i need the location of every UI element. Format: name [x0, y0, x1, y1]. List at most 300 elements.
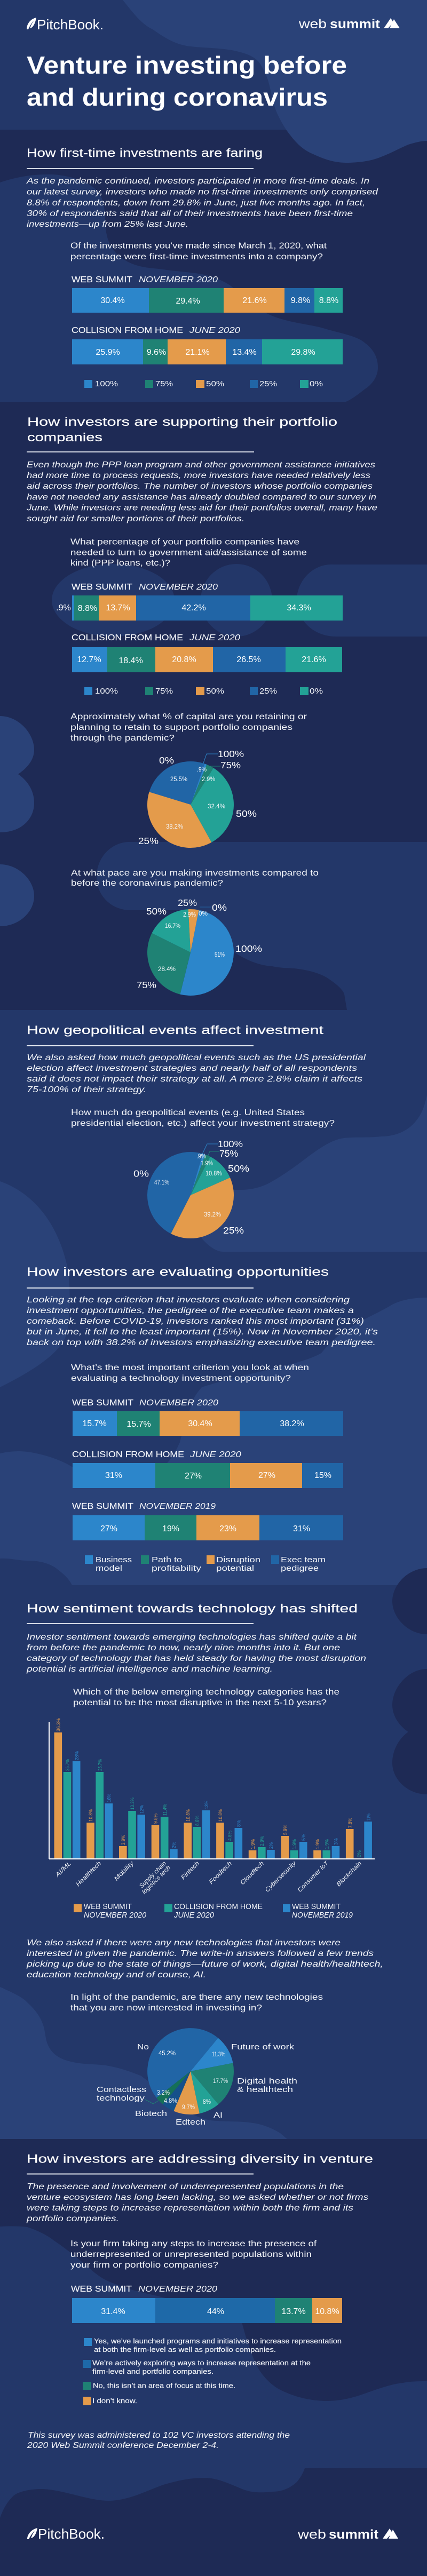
- series label: Web Summit November 2019: WEB SUMMIT: [72, 1502, 133, 1511]
- intro text: We also asked how much geopolitical events such as the US presidential: [27, 1053, 366, 1062]
- stacked bar: Web Summit 2019: 23%: [219, 1524, 236, 1533]
- stacked bar: Collision from Home: 9.6%: [147, 348, 166, 357]
- pie chart: geopolitical impact: 10.8%: [205, 1170, 222, 1177]
- series label: Web Summit November 2020: WEB SUMMIT: [72, 1398, 133, 1408]
- category labels: Cloudtech: [239, 1861, 265, 1886]
- legend: [85, 1555, 326, 1573]
- stacked bar: Collision from Home: 20.8%: [172, 655, 196, 664]
- bar group: AI/ML: 36.3%: [56, 1718, 61, 1731]
- panel: evaluating opportunities: [27, 1265, 378, 1573]
- bar group: Foodtech: 4.8%: [227, 1831, 232, 1841]
- intro text: back on top with 38.2% of investors emphasizing executive team pedigree.: [27, 1338, 376, 1347]
- series label: Web Summit November 2020: WEB SUMMIT: [72, 275, 132, 284]
- intro text: Looking at the top criterion that investors evaluate when considering: [27, 1295, 350, 1305]
- legend: [83, 2337, 342, 2405]
- logo: Web Summit: web: [298, 17, 327, 31]
- pie chart: investment pace: 25%: [178, 897, 197, 908]
- question: potential to be the most disruptive in the next 5-10 years?: [73, 1698, 327, 1707]
- stacked bar: Web Summit 2019: [73, 1515, 343, 1540]
- legend: COLLISION FROM HOME: [174, 1902, 263, 1911]
- series label: Web Summit November 2020: NOVEMBER 2020: [139, 583, 218, 592]
- pie chart: new technologies: 4.8%: [164, 2097, 177, 2104]
- heading: How investors are addressing diversity in venture: [27, 2152, 373, 2165]
- pie chart: investment pace: 16.7%: [165, 922, 180, 929]
- title: [27, 51, 347, 111]
- legend: model: [96, 1564, 122, 1573]
- legend: Path to: [152, 1555, 182, 1564]
- logo: Web Summit: [298, 17, 400, 31]
- pie chart: new technologies: Digital health: [237, 2077, 297, 2086]
- stacked bar: Web Summit 2019: 19%: [162, 1524, 179, 1533]
- bar group: Blockchain: 11%: [366, 1814, 371, 1820]
- pie chart: investment pace: 51%: [215, 951, 225, 958]
- stacked bar: Web Summit 2019: 27%: [100, 1524, 117, 1533]
- intro text: portfolio companies.: [26, 2214, 119, 2223]
- title: Venture investing before: [27, 51, 347, 79]
- question: Which of the below emerging technology categories has the: [73, 1688, 339, 1697]
- legend: [84, 687, 323, 696]
- category labels: Fintech: [180, 1861, 201, 1881]
- heading: [27, 415, 337, 444]
- series label: Collision from Home June 2020: JUNE 2020: [189, 326, 240, 335]
- stacked bar: Web Summit: 29.4%: [176, 297, 200, 306]
- legend: 100%: [95, 687, 118, 696]
- category labels: Cybersecurity: [264, 1860, 298, 1894]
- bar group: Healthtech: 10.8%: [88, 1809, 93, 1822]
- legend: Exec team: [281, 1555, 326, 1564]
- bar group: AI/ML: 28%: [74, 1751, 80, 1760]
- bar group: Healthtech: [86, 1759, 113, 1858]
- stacked bar: Web Summit 2020: 15.7%: [82, 1419, 107, 1428]
- bar group: Mobility: 12%: [139, 1805, 144, 1814]
- pie chart: capital retained: 38.2%: [166, 823, 183, 830]
- bar chart: disruptive technologies: [49, 1718, 375, 1896]
- logo: Web Summit footer: web: [297, 2527, 326, 2542]
- series label: Collision from Home June 2020: [72, 1450, 241, 1459]
- stacked bar: Web Summit: 9.8%: [291, 296, 310, 305]
- heading: companies: [27, 431, 102, 444]
- legend: WEB SUMMIT: [84, 1902, 132, 1911]
- intro text: from before the pandemic to now, nearly nine months into it. But one: [27, 1643, 340, 1652]
- body text: interested in given the pandemic. The write-in answers followed a few trends: [27, 1949, 374, 1958]
- stacked bar: Collision from Home: [72, 647, 342, 672]
- survey note: This survey was administered to 102 VC investors attending the: [28, 2431, 290, 2440]
- question: kind (PPP loans, etc.)?: [70, 559, 170, 568]
- bar group: Supply chain logistics tech: 2%: [171, 1842, 177, 1848]
- pie chart: new technologies: 45.2%: [159, 2049, 176, 2057]
- question: [70, 1993, 323, 2013]
- intro text: were taking steps to increase representation within both the firm and its: [27, 2204, 353, 2213]
- bar group: Healthtech: 16%: [107, 1794, 112, 1802]
- bar group: Mobility: 3.9%: [121, 1835, 126, 1845]
- question: [70, 538, 307, 568]
- question: Approximately what % of capital are you retaining or: [70, 712, 307, 721]
- logo: Web Summit footer: summit: [329, 2527, 378, 2542]
- stacked bar: Collision from Home: 27%: [185, 1472, 202, 1481]
- category labels: [54, 1860, 363, 1896]
- pie chart: capital retained: 50%: [236, 808, 257, 819]
- stacked bar: Web Summit 2020: [73, 1411, 343, 1436]
- legend: 50%: [206, 687, 224, 696]
- pie chart: investment pace: 50%: [146, 906, 167, 917]
- question: needed to turn to government aid/assistance of some: [70, 548, 307, 557]
- question: How much do geopolitical events (e.g. United States: [71, 1108, 305, 1117]
- pie chart: geopolitical impact: 100%: [218, 1139, 243, 1149]
- bar group: Cybersecurity: 1.9%: [292, 1839, 297, 1849]
- pie chart: new technologies: No: [137, 2042, 149, 2052]
- intro text: June. While investors are needing less aid for their portfolios overall, many have: [26, 504, 377, 513]
- intro text: category of technology that has held steady for having the most disruption: [27, 1654, 366, 1663]
- series label: Web Summit November 2019: [72, 1502, 216, 1511]
- pie chart: new technologies: [97, 2028, 297, 2127]
- bar group: Healthtech: 25.7%: [97, 1759, 102, 1771]
- bar group: Cybersecurity: [281, 1825, 307, 1858]
- stacked bar: Collision from Home: 25.9%: [96, 348, 120, 357]
- intro text: election affect investment strategies and nearly half of all respondents: [27, 1064, 357, 1073]
- pie chart: new technologies: 11.3%: [212, 2050, 225, 2058]
- legend: 75%: [155, 379, 173, 388]
- bar group: Cloudtech: 2.9%: [259, 1836, 265, 1846]
- category labels: Mobility: [113, 1860, 136, 1882]
- intro text: [26, 177, 378, 229]
- pie chart: capital retained: 2.9%: [202, 775, 215, 783]
- panel: supporting portfolio companies: [26, 415, 377, 996]
- intro text: [26, 460, 377, 523]
- heading: How sentiment towards technology has shifted: [27, 1602, 358, 1615]
- pie chart: new technologies: 3.2%: [157, 2089, 170, 2096]
- pie chart: new technologies: technology: [97, 2094, 145, 2103]
- stacked bar: Collision from Home: 18.4%: [118, 656, 143, 665]
- series label: Collision from Home June 2020: [72, 633, 240, 642]
- series label: Web Summit November 2020: [72, 1398, 218, 1408]
- intro text: comeback. Before COVID-19, investors ranked this most important (31%): [27, 1317, 364, 1326]
- intro text: [27, 1053, 366, 1094]
- legend: 50%: [206, 379, 224, 388]
- pie chart: capital retained: 0%: [159, 755, 174, 766]
- stacked bar: Collision from Home: 31%: [105, 1471, 122, 1480]
- question: [71, 1108, 335, 1128]
- series label: Web Summit November 2020: [72, 275, 218, 284]
- series label: Web Summit November 2020: [71, 2285, 217, 2294]
- intro text: [26, 1633, 366, 1674]
- legend: firm-level and portfolio companies.: [92, 2367, 213, 2375]
- bar group: Cloudtech: [249, 1836, 275, 1858]
- stacked bar: diversity: 44%: [207, 2307, 224, 2316]
- pie chart: capital retained: 75%: [220, 760, 241, 770]
- question: [70, 241, 327, 261]
- question: What’s the most important criterion you look at when: [71, 1363, 309, 1372]
- stacked bar: Collision from Home: 15%: [314, 1471, 331, 1480]
- pie chart: capital retained: [138, 749, 257, 848]
- pie chart: geopolitical impact: 47.1%: [154, 1179, 169, 1186]
- intro text: have not needed any assistance has already doubled compared to our survey in: [27, 493, 376, 502]
- category labels: Supply chain: [138, 1861, 168, 1890]
- intro text: said it does not impact their strategy at all. A mere 2.8% claim it affects: [27, 1075, 362, 1084]
- pie chart: investment pace: 100%: [235, 943, 262, 954]
- stacked bar: Web Summit: 30.4%: [100, 296, 125, 305]
- legend: [74, 1902, 353, 1920]
- bar group: Consumer IoT: 3%: [334, 1838, 339, 1845]
- pie chart: capital retained: .9%: [197, 766, 207, 773]
- heading: How investors are evaluating opportunities: [27, 1265, 329, 1278]
- question: planning to retain to support portfolio companies: [70, 723, 292, 732]
- category labels: Foodtech: [208, 1861, 233, 1886]
- pie chart: new technologies: Biotech: [135, 2109, 167, 2118]
- bar group: Fintech: 8.6%: [195, 1816, 200, 1826]
- intro text: potential is artificial intelligence and machine learning.: [26, 1665, 273, 1674]
- legend: No, this isn’t an area of focus at this time.: [93, 2382, 235, 2389]
- question: presidential election, etc.) affect your investment strategy?: [71, 1119, 335, 1128]
- pie chart: investment pace: [137, 897, 262, 996]
- bar group: Mobility: 13.3%: [130, 1798, 135, 1810]
- pie chart: investment pace: 0%: [199, 910, 208, 917]
- stacked bar: Web Summit: 8.8%: [319, 296, 338, 305]
- bar group: Foodtech: 8%: [236, 1820, 241, 1827]
- intro text: As the pandemic continued, investors participated in more first-time deals. In: [26, 177, 369, 186]
- question: that you are now interested in investing in?: [70, 2003, 262, 2013]
- bar group: Cloudtech: 1.9%: [250, 1839, 256, 1849]
- question: your firm or portfolio companies?: [70, 2261, 218, 2270]
- intro text: 30% of respondents said that all of their investments have been first-time: [27, 209, 353, 218]
- stacked bar: Collision from Home: 21.6%: [302, 655, 326, 664]
- series label: Web Summit November 2020: NOVEMBER 2020: [139, 1398, 218, 1408]
- legend: JUNE 2020: [173, 1911, 215, 1920]
- legend: We’re actively exploring ways to increase representation at the: [92, 2359, 311, 2367]
- stacked bar: diversity: 10.8%: [315, 2307, 339, 2316]
- panel: geopolitical events: [27, 1023, 366, 1238]
- bar group: Foodtech: 10.8%: [218, 1809, 223, 1822]
- legend: 75%: [155, 687, 173, 696]
- legend: 0%: [310, 379, 323, 388]
- body text: picking up due to the state of things—future of work, digital health/healthtech,: [26, 1960, 383, 1969]
- pie chart: new technologies: AI: [213, 2111, 223, 2120]
- stacked bar: Collision from Home: [73, 1463, 343, 1488]
- intro text: 8.8% of respondents, down from 29.8% in June, just five months ago. In fact,: [27, 198, 365, 208]
- pie chart: investment pace: 2.9%: [183, 911, 196, 918]
- logo: PitchBook footer: PitchBook.: [38, 2526, 105, 2542]
- question: Of the investments you’ve made since March 1, 2020, what: [70, 241, 327, 251]
- pie chart: new technologies: 9.7%: [182, 2103, 195, 2111]
- question: [70, 2239, 317, 2270]
- category labels: Consumer IoT: [297, 1860, 330, 1894]
- question: underrepresented or unrepresented populations within: [70, 2250, 312, 2259]
- pie chart: geopolitical impact: 1.9%: [201, 1159, 213, 1167]
- question: evaluating a technology investment opportunity?: [71, 1374, 291, 1383]
- series label: Collision from Home June 2020: COLLISION FROM HOME: [72, 326, 183, 335]
- question: What percentage of your portfolio companies have: [70, 538, 299, 546]
- series label: Collision from Home June 2020: COLLISION FROM HOME: [72, 633, 183, 642]
- question: [71, 1363, 309, 1383]
- pie chart: geopolitical impact: [133, 1139, 249, 1238]
- pie chart: new technologies: Edtech: [176, 2118, 205, 2127]
- stacked bar: Web Summit 2019: 31%: [293, 1524, 310, 1533]
- stacked bar: Web Summit: 8.8%: [78, 604, 97, 613]
- bar group: Fintech: [184, 1801, 210, 1858]
- panel: addressing diversity: [26, 2152, 373, 2405]
- question: [71, 869, 319, 888]
- pie chart: investment pace: 0%: [212, 902, 227, 913]
- stacked bar: Collision from Home: 27%: [258, 1471, 275, 1480]
- panel: sentiment towards technology: [26, 1602, 383, 2127]
- bar group: Foodtech: [216, 1809, 242, 1858]
- stacked bar: Web Summit: .9%: [56, 603, 71, 613]
- series label: Collision from Home June 2020: JUNE 2020: [189, 633, 240, 642]
- pie chart: capital retained: 32.4%: [208, 802, 225, 810]
- bar group: Consumer IoT: [313, 1838, 339, 1858]
- question: [70, 712, 307, 743]
- stacked bar: diversity: 13.7%: [281, 2307, 306, 2316]
- intro text: venture ecosystem has long been lacking, so we asked whether or not firms: [27, 2193, 368, 2202]
- question: In light of the pandemic, are there any new technologies: [70, 1993, 323, 2002]
- series label: Web Summit November 2020: [72, 583, 218, 592]
- stacked bar: Web Summit: [72, 288, 343, 313]
- legend: profitability: [152, 1564, 202, 1573]
- question: Is your firm taking any steps to increase the presence of: [70, 2239, 317, 2248]
- stacked bar: Collision from Home: 29.8%: [291, 348, 315, 357]
- bar group: Supply chain logistics tech: [152, 1804, 178, 1858]
- intro text: aid across their portfolios. The number of investors whose portfolio companies: [27, 482, 373, 491]
- panel: first-time investments: [26, 146, 378, 388]
- legend: at both the firm-level as well as portfolio companies.: [94, 2346, 276, 2354]
- survey note: [27, 2431, 290, 2450]
- bar group: Consumer IoT: 1.9%: [324, 1839, 329, 1849]
- bar group: Blockchain: [346, 1814, 372, 1858]
- stacked bar: Web Summit: 34.3%: [287, 603, 311, 613]
- legend: I don’t know.: [92, 2397, 137, 2405]
- series label: Collision from Home June 2020: COLLISION FROM HOME: [72, 1450, 184, 1459]
- intro text: but in June, it fell to the least important (15%). Now in November 2020, it’s: [27, 1327, 378, 1337]
- body text: We also asked if there were any new technologies that investors were: [27, 1938, 341, 1947]
- heading: How first-time investments are faring: [27, 146, 263, 160]
- pie chart: geopolitical impact: 25%: [223, 1225, 244, 1236]
- stacked bar: Web Summit 2020: 15.7%: [126, 1420, 151, 1429]
- legend: [84, 379, 323, 388]
- title: and during coronavirus: [27, 83, 328, 111]
- stacked bar: Web Summit: 13.7%: [106, 603, 130, 613]
- legend: 25%: [259, 379, 277, 388]
- stacked bar: Collision from Home: [72, 339, 343, 364]
- bar group: Cloudtech: 2%: [268, 1842, 274, 1849]
- question: At what pace are you making investments compared to: [71, 869, 319, 878]
- bar group: Cybersecurity: 5%: [301, 1834, 306, 1841]
- bar group: Supply chain logistics tech: 11.4%: [162, 1804, 168, 1816]
- legend: potential: [216, 1564, 254, 1573]
- logo: PitchBook: PitchBook.: [37, 17, 104, 33]
- pie chart: capital retained: 100%: [218, 749, 244, 759]
- pie chart: investment pace: 28.4%: [158, 965, 176, 973]
- bar group: Fintech: 10.8%: [185, 1809, 191, 1822]
- question: through the pandemic?: [70, 734, 175, 743]
- intro text: had more time to process requests, more investors have needed relatively less: [27, 471, 370, 480]
- pie chart: geopolitical impact: 39.2%: [204, 1211, 221, 1218]
- question: percentage were first-time investments into a company?: [70, 252, 323, 261]
- stacked bar: Collision from Home: 12.7%: [77, 655, 101, 664]
- pie chart: new technologies: 8%: [203, 2098, 211, 2105]
- bar group: AI/ML: 25.7%: [65, 1759, 70, 1771]
- pie chart: capital retained: 25.5%: [170, 775, 187, 783]
- stacked bar: Collision from Home: 13.4%: [232, 348, 257, 357]
- stacked bar: Web Summit: 42.2%: [181, 603, 206, 613]
- heading: How geopolitical events affect investment: [27, 1023, 323, 1037]
- stacked bar: Web Summit 2020: 38.2%: [280, 1419, 304, 1428]
- survey note: 2020 Web Summit conference December 2-4.: [27, 2441, 219, 2450]
- pie chart: new technologies: 17.7%: [213, 2077, 228, 2085]
- body text: [26, 1938, 383, 1979]
- category labels: logistics tech: [141, 1865, 172, 1896]
- series label: Web Summit November 2020: NOVEMBER 2020: [138, 2285, 217, 2294]
- category labels: Healthtech: [75, 1861, 102, 1888]
- body text: education technology and of course, AI.: [27, 1970, 206, 1979]
- intro text: [26, 2182, 368, 2223]
- series label: Collision from Home June 2020: [72, 326, 240, 335]
- bar group: Supply chain logistics tech: 9.8%: [153, 1814, 159, 1824]
- legend: NOVEMBER 2020: [84, 1911, 147, 1920]
- category labels: Blockchain: [336, 1861, 363, 1888]
- intro text: investments—up from 25% last June.: [27, 220, 188, 229]
- pie chart: geopolitical impact: 75%: [219, 1148, 238, 1159]
- bar group: Cybersecurity: 5.9%: [283, 1825, 288, 1835]
- bar group: Consumer IoT: 1.9%: [315, 1839, 320, 1849]
- pie chart: new technologies: Future of work: [231, 2042, 295, 2052]
- logo: Web Summit footer: [297, 2527, 398, 2542]
- stacked bar: Collision from Home: 26.5%: [236, 655, 261, 664]
- intro text: The presence and involvement of underrepresented populations in the: [27, 2182, 344, 2191]
- legend: 0%: [310, 687, 323, 696]
- series label: Web Summit November 2020: WEB SUMMIT: [72, 583, 132, 592]
- series label: Web Summit November 2020: NOVEMBER 2020: [139, 275, 218, 284]
- intro text: 75-100% of their strategy.: [27, 1085, 146, 1094]
- intro text: [27, 1295, 378, 1347]
- bar group: Blockchain: 0%: [357, 1850, 362, 1857]
- question: [73, 1688, 339, 1707]
- legend: Business: [96, 1555, 132, 1564]
- intro text: Even though the PPP loan program and other government assistance initiatives: [27, 460, 375, 470]
- series label: Web Summit November 2019: NOVEMBER 2019: [139, 1502, 216, 1511]
- legend: NOVEMBER 2019: [292, 1911, 353, 1920]
- intro text: investment opportunities, the pedigree of the executive team makes a: [27, 1306, 354, 1315]
- stacked bar: diversity: [72, 2298, 342, 2323]
- stacked bar: Web Summit 2020: 30.4%: [188, 1419, 212, 1428]
- bar group: Fintech: 13%: [204, 1801, 209, 1809]
- pie chart: investment pace: 75%: [137, 980, 156, 990]
- pie chart: geopolitical impact: .9%: [196, 1152, 206, 1160]
- bar group: AI/ML: [54, 1718, 80, 1858]
- stacked bar: Web Summit: 21.6%: [242, 296, 267, 305]
- pie chart: new technologies: Contactless: [97, 2085, 146, 2094]
- legend: pedigree: [281, 1564, 319, 1573]
- pie chart: capital retained: 25%: [138, 836, 159, 846]
- stacked bar: diversity: 31.4%: [101, 2307, 125, 2316]
- series label: Collision from Home June 2020: JUNE 2020: [189, 1450, 241, 1459]
- pie chart: geopolitical impact: 50%: [228, 1163, 249, 1174]
- legend: Yes, we’ve launched programs and initiatives to increase representation: [94, 2337, 342, 2345]
- stacked bar: Collision from Home: 21.1%: [185, 348, 210, 357]
- series label: Web Summit November 2020: WEB SUMMIT: [71, 2285, 132, 2294]
- logo: Web Summit: summit: [330, 17, 380, 31]
- pie chart: new technologies: & healthtech: [237, 2085, 293, 2094]
- bar group: Mobility: [119, 1798, 145, 1858]
- legend: WEB SUMMIT: [292, 1902, 341, 1911]
- legend: Disruption: [216, 1555, 260, 1564]
- intro text: Investor sentiment towards emerging technologies has shifted quite a bit: [27, 1633, 357, 1642]
- category labels: AI/ML: [54, 1861, 73, 1879]
- bar group: Blockchain: 7.8%: [347, 1818, 353, 1828]
- question: before the coronavirus pandemic?: [71, 879, 223, 888]
- pie chart: geopolitical impact: 0%: [133, 1168, 149, 1179]
- intro text: our latest survey, investors who made no first-time investments only comprised: [27, 188, 378, 196]
- stacked bar: Web Summit: [56, 595, 343, 621]
- intro text: sought aid for smaller portions of their portfolios.: [27, 514, 244, 523]
